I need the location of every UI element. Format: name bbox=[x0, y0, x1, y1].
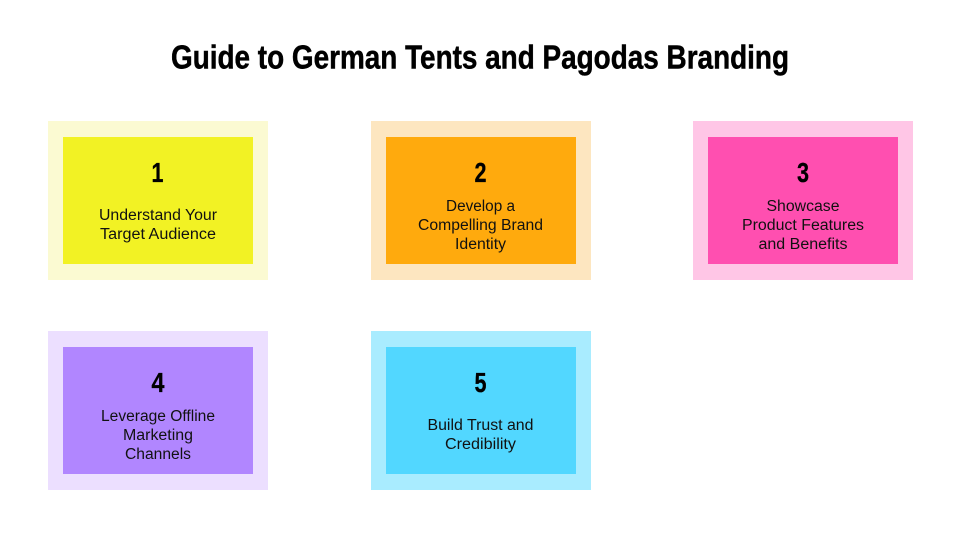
number 2: 2 bbox=[474, 157, 486, 188]
text: step 3 bbox=[742, 198, 864, 253]
panel: step 1 bbox=[48, 121, 268, 280]
number 1: 1 bbox=[152, 157, 164, 188]
text: step 1: Target Audience bbox=[100, 226, 216, 243]
number 3: 3 bbox=[797, 157, 809, 188]
text: step 4: Channels bbox=[125, 446, 191, 463]
number 5: 5 bbox=[474, 367, 486, 398]
text: step 5: Build Trust and bbox=[428, 417, 534, 434]
text: step 5: Credibility bbox=[445, 436, 516, 453]
panel: step 5 bbox=[371, 331, 591, 490]
text: step 5 bbox=[428, 417, 534, 453]
text: step 2: Identity bbox=[455, 236, 506, 253]
text: step 2: Compelling Brand bbox=[418, 217, 543, 234]
text: step 4 bbox=[101, 408, 215, 463]
text: step 3: and Benefits bbox=[758, 236, 848, 253]
number 4: 4 bbox=[152, 367, 165, 398]
panel: step 2 bbox=[371, 121, 591, 280]
text: step 1: Understand Your bbox=[99, 207, 217, 224]
panel: step 4 bbox=[48, 331, 268, 490]
text: step 4: Leverage Offline bbox=[101, 408, 215, 425]
title: Guide to German Tents and Pagodas Branding bbox=[171, 38, 789, 76]
panel: step 3 bbox=[693, 121, 913, 280]
text: step 2: Develop a bbox=[446, 198, 515, 215]
text: step 4: Marketing bbox=[123, 427, 193, 444]
text: step 1 bbox=[99, 207, 217, 243]
text: step 3: Showcase bbox=[766, 198, 840, 215]
text: step 2 bbox=[418, 198, 543, 253]
text: step 3: Product Features bbox=[742, 217, 864, 234]
